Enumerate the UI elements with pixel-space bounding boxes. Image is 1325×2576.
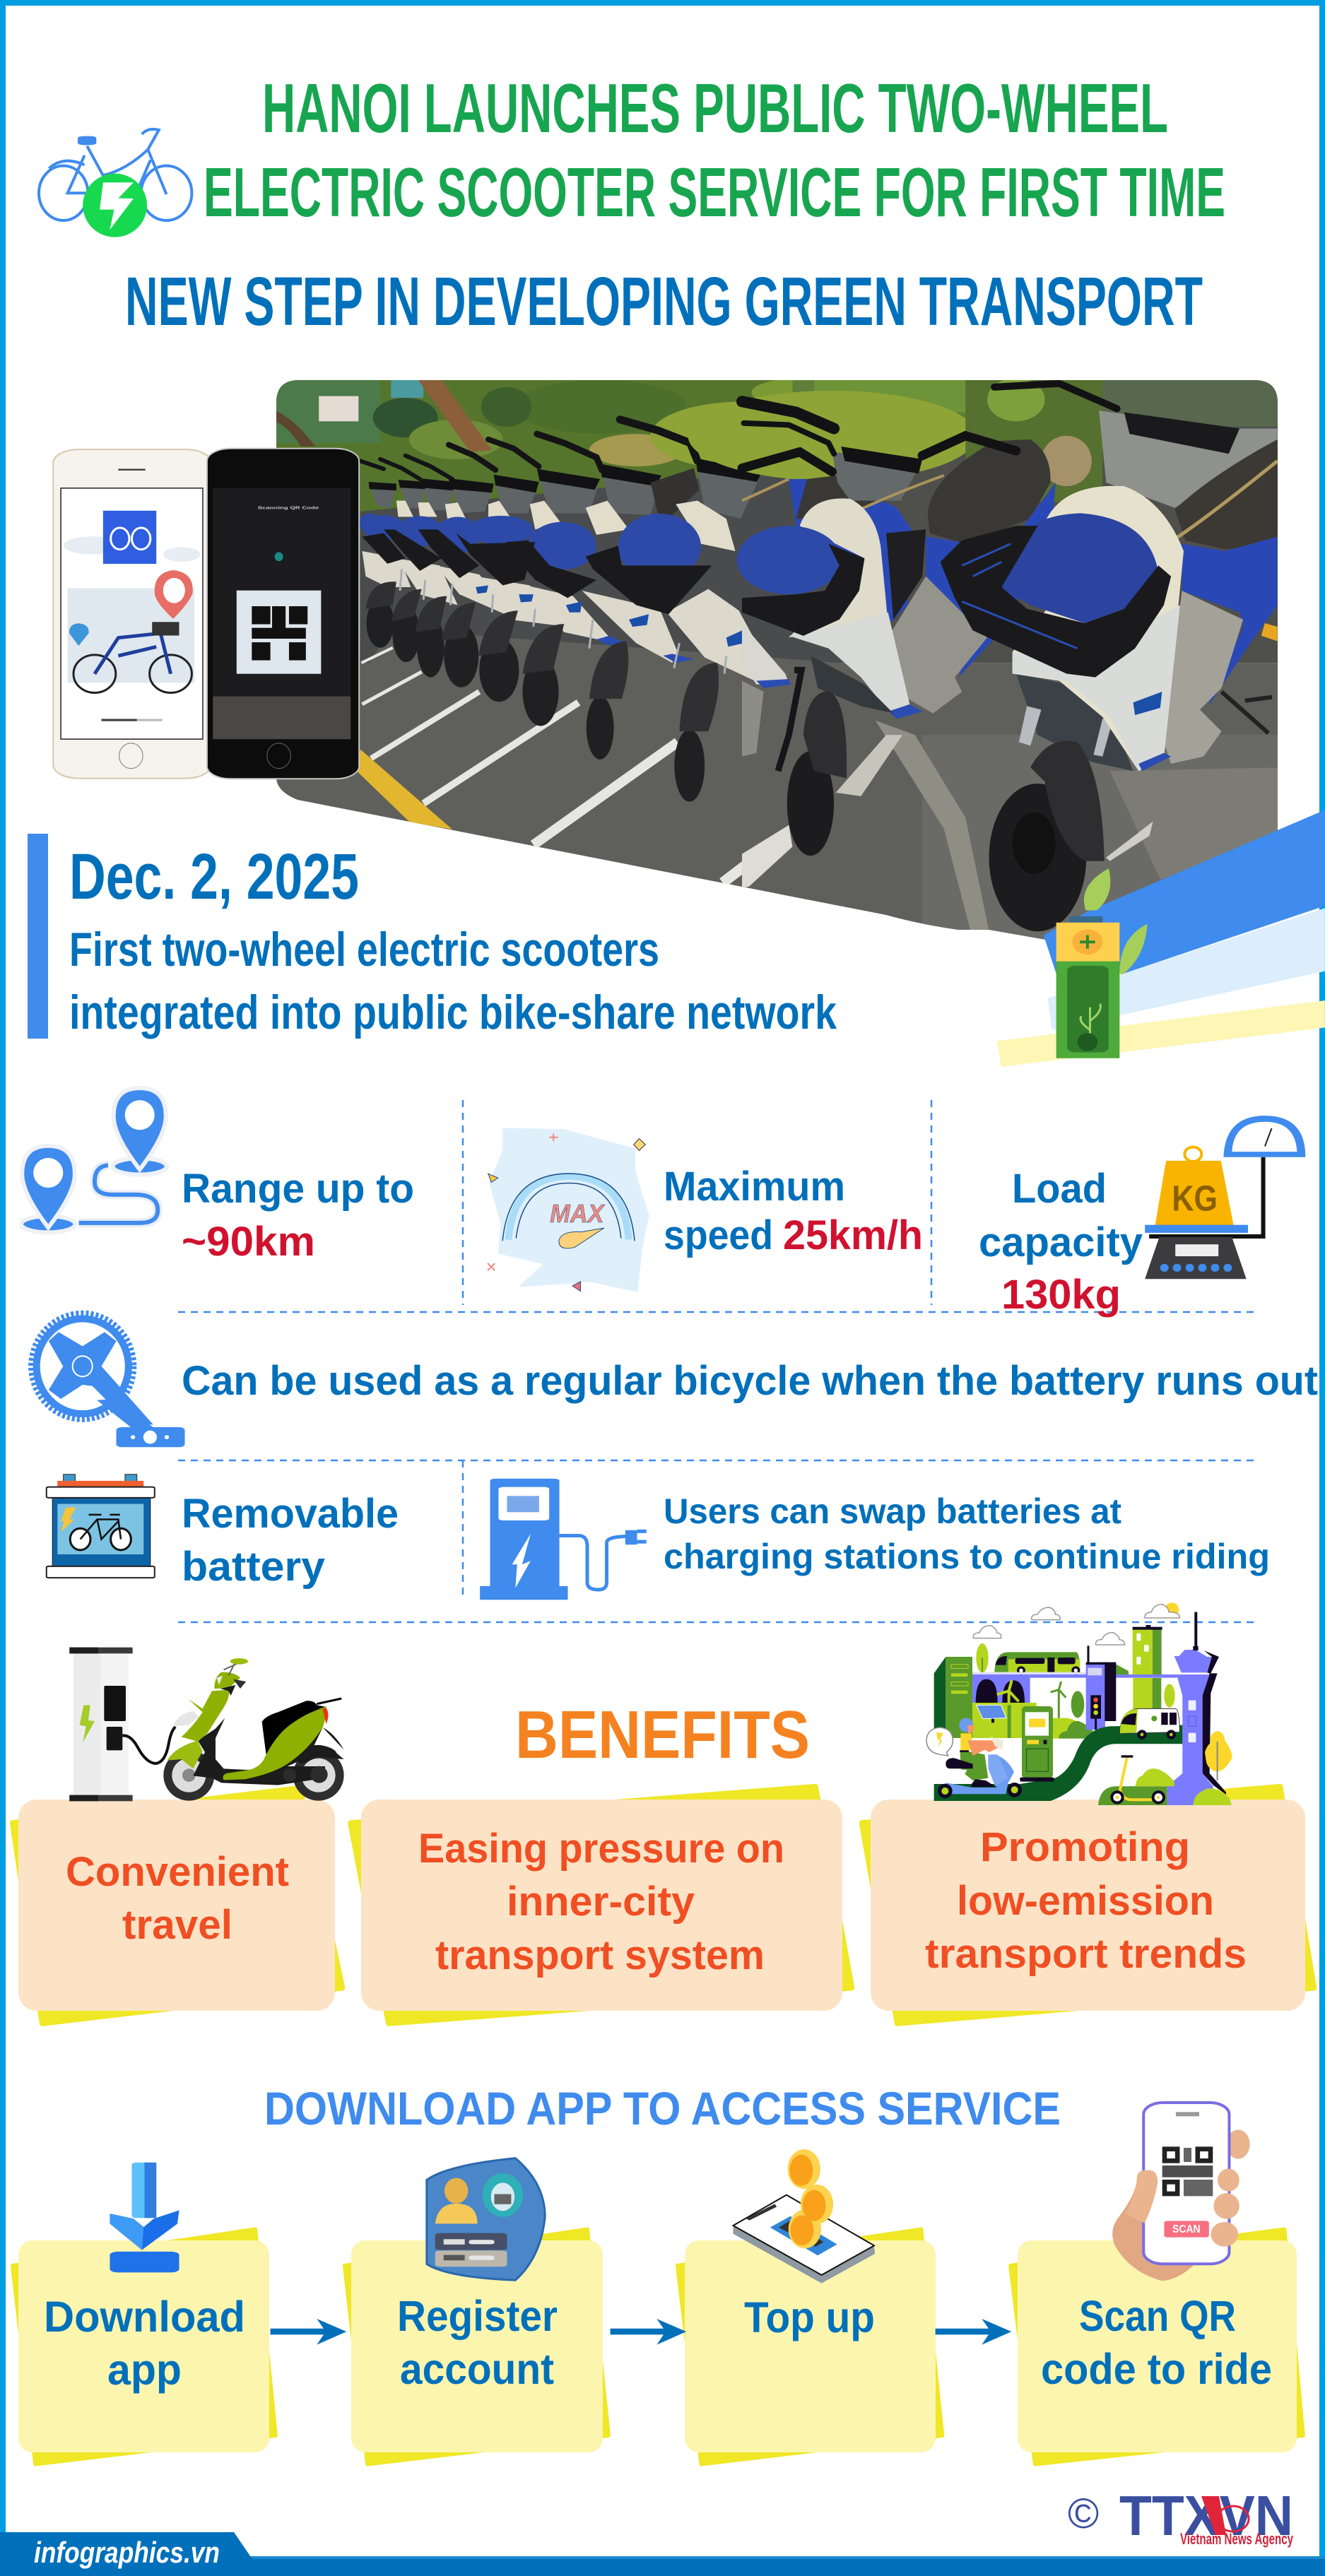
text: maximum speed: Maximum xyxy=(664,1164,845,1210)
icon: black phone scanning QR: Scanning QR Code xyxy=(258,506,319,510)
text: removable battery: battery xyxy=(182,1544,325,1590)
text: range xyxy=(182,1166,414,1265)
panel: convenient travel xyxy=(13,1788,342,2023)
icon: green city illustration xyxy=(926,1602,1232,1805)
panel: convenient travel: Convenient xyxy=(66,1849,289,1895)
panel: step 3 top up xyxy=(678,2229,942,2464)
icon: electric bicycle xyxy=(39,129,192,237)
text: swap batteries: charging stations to continue riding xyxy=(664,1537,1270,1576)
panel: step 4 scan QR: Scan QR xyxy=(1079,2292,1236,2340)
panel: easing pressure: inner-city xyxy=(507,1879,695,1925)
panel: easing pressure: transport system xyxy=(435,1932,765,1978)
icon: speedometer: MAX xyxy=(550,1200,606,1229)
arrow xyxy=(611,2319,686,2345)
icon: phone and coins xyxy=(733,2149,875,2283)
panel: step 1 download app: Download xyxy=(44,2293,245,2341)
icon: charging post and green scooter xyxy=(69,1648,344,1801)
heading: download app: DOWNLOAD APP TO ACCESS SERVICE xyxy=(264,2082,1061,2134)
text: swap batteries xyxy=(664,1491,1270,1576)
icon: account card xyxy=(427,2158,545,2280)
decorative bands xyxy=(997,810,1325,1067)
icon: weighing scale xyxy=(1145,1116,1305,1279)
text: regular bicycle: Can be used as a regular bicycle when the battery runs out xyxy=(182,1358,1318,1404)
text: maximum speed: 25km/h xyxy=(783,1212,923,1258)
panel: step 3 top up: Top up xyxy=(744,2293,875,2341)
icon: speedometer xyxy=(488,1128,649,1292)
icon: bicycle crank xyxy=(32,1313,184,1447)
footer: infographics.vn xyxy=(0,2532,1325,2576)
text: range: Range up to xyxy=(182,1166,414,1212)
icon: hand holding phone with QR xyxy=(1112,2103,1250,2281)
logo: copyright TTXVN: TTXVN xyxy=(1119,2484,1293,2547)
icon: black phone scanning QR xyxy=(207,449,359,779)
panel: low-emission trends xyxy=(862,1787,1314,2023)
date block xyxy=(28,834,837,1039)
logo: copyright TTXVN: © xyxy=(1068,2490,1099,2537)
panel: low-emission trends: transport trends xyxy=(925,1931,1247,1977)
icon: hand holding phone with QR: SCAN xyxy=(1172,2223,1201,2235)
panel: step 2 register account xyxy=(345,2229,608,2464)
panel: step 2 register account: Register xyxy=(397,2292,558,2340)
panel: low-emission trends: Promoting xyxy=(980,1824,1190,1870)
panel: convenient travel: travel xyxy=(122,1902,232,1948)
text: load capacity xyxy=(979,1166,1143,1318)
arrow xyxy=(936,2319,1011,2345)
panel: step 1 download app: app xyxy=(107,2346,182,2394)
icon: weighing scale: KG xyxy=(1172,1178,1218,1218)
date block: integrated into public bike-share network xyxy=(69,986,837,1039)
text: load capacity: 130kg xyxy=(1001,1272,1121,1318)
dashed dividers xyxy=(178,1100,1259,1622)
photo: row of electric scooters xyxy=(276,374,1290,940)
panel: step 2 register account: account xyxy=(400,2345,554,2393)
text: maximum speed xyxy=(664,1164,923,1258)
icon: download arrow xyxy=(110,2163,179,2272)
date block: Dec. 2, 2025 xyxy=(69,841,359,913)
date block: First two-wheel electric scooters xyxy=(69,923,659,976)
panel: low-emission trends: low-emission xyxy=(957,1878,1214,1924)
text: range: ~90km xyxy=(182,1219,315,1265)
footer: infographics.vn: infographics.vn xyxy=(34,2536,220,2569)
text: removable battery xyxy=(182,1491,399,1590)
icon: green battery with leaves xyxy=(1056,868,1148,1058)
text: load capacity: capacity xyxy=(979,1219,1143,1265)
text: removable battery: Removable xyxy=(182,1491,399,1537)
icon: route pins xyxy=(21,1088,167,1232)
panel: step 4 scan QR xyxy=(1011,2229,1303,2464)
text: maximum speed: speed xyxy=(664,1212,773,1258)
heading: benefits: BENEFITS xyxy=(515,1697,810,1773)
icon: charging station xyxy=(480,1479,647,1600)
arrow xyxy=(271,2319,346,2345)
title xyxy=(204,69,1225,231)
text: load capacity: Load xyxy=(1012,1166,1107,1212)
panel: step 4 scan QR: code to ride xyxy=(1041,2345,1272,2393)
panel: easing pressure xyxy=(351,1787,852,2023)
panel: easing pressure: Easing pressure on xyxy=(418,1826,784,1872)
text: swap batteries: Users can swap batteries at xyxy=(664,1491,1121,1531)
icon: removable battery xyxy=(47,1475,155,1578)
panel: step 1 download app xyxy=(13,2229,276,2464)
icon: white phone with app xyxy=(53,449,211,779)
